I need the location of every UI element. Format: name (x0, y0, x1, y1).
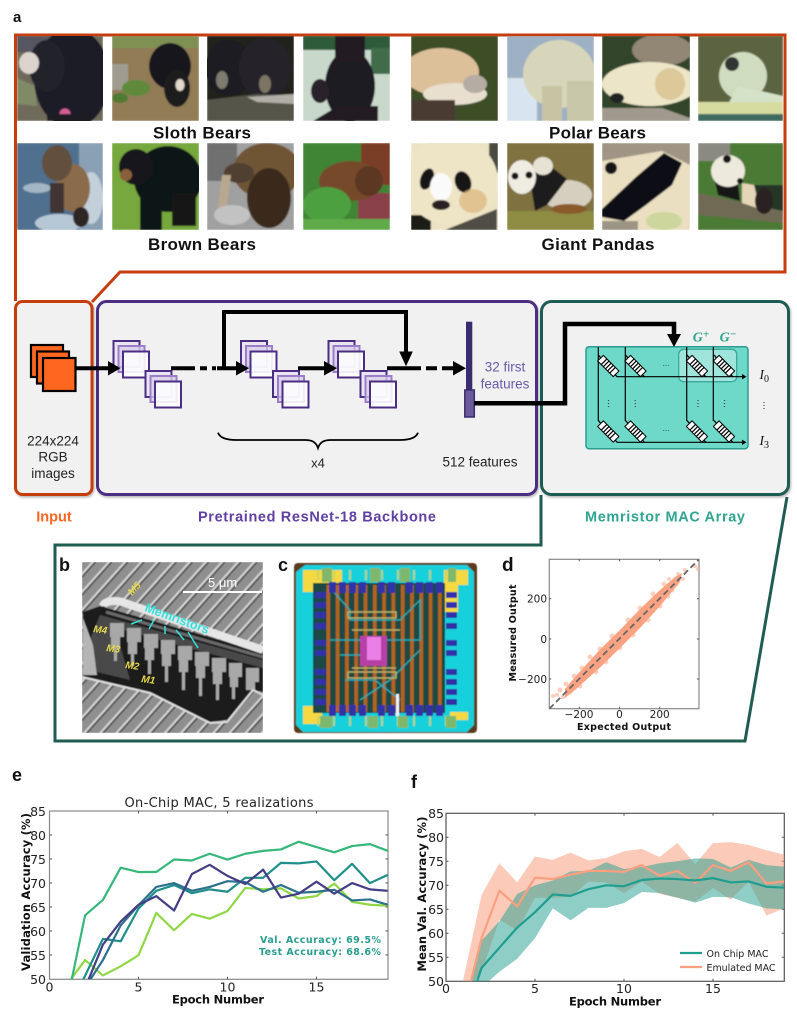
label: Sloth Bears: Sloth Bears (153, 124, 251, 142)
callout: accuracy values (259, 935, 381, 958)
legend: On Chip MAC (706, 949, 769, 960)
chart f: mean validation accuracy: 15 (705, 981, 721, 996)
chart e: validation accuracy: 50 (30, 972, 46, 987)
chart e: validation accuracy: 15 (309, 980, 324, 994)
chart e: validation accuracy: 60 (30, 924, 46, 939)
arrows: main data flow (76, 361, 466, 376)
conv block group 3 (328, 341, 396, 408)
panel: input box (16, 302, 92, 494)
label: Brown Bears: Brown Bears (148, 235, 256, 254)
chart f: mean validation accuracy: 80 (428, 830, 444, 845)
panel label c: c (278, 555, 288, 575)
chart f: mean validation accuracy: 10 (616, 981, 632, 996)
image: SEM of chip: Memristors (143, 601, 211, 637)
photo: sloth bear 1 (17, 36, 103, 121)
image: SEM of chip: M5 (126, 580, 144, 598)
photo: polar bear 2 (507, 36, 594, 121)
feature vector bar (465, 322, 474, 417)
brace x4 (218, 433, 418, 471)
heading: Input: Input (36, 510, 72, 526)
memristor crossbar array (586, 347, 764, 449)
chart e: validation accuracy: Epoch Number (172, 993, 264, 1007)
chart f: mean validation accuracy: 85 (428, 806, 444, 821)
photo: giant pandas 2 (507, 143, 594, 230)
panel label d: d (502, 555, 514, 576)
chart f: mean validation accuracy: 0 (442, 981, 450, 996)
legend (680, 949, 776, 974)
chart d: measured vs expected scatter: 200 (650, 709, 670, 721)
photo: brown bear 1 (17, 143, 103, 230)
memristor crossbar array: ... (663, 424, 669, 433)
photo: polar bear 4 (698, 36, 783, 121)
chart f: mean validation accuracy: 75 (428, 854, 444, 869)
panel label a: a (13, 9, 22, 26)
chart d: measured vs expected scatter: −200 (518, 674, 547, 686)
chart d: measured vs expected scatter: 0 (540, 634, 547, 646)
panel: resnet backbone box (98, 302, 536, 494)
panel label b: b (59, 555, 70, 575)
photo: giant panda 1 (411, 143, 498, 230)
chart f: mean validation accuracy: Epoch Number (569, 995, 661, 1009)
chart e title: On-Chip MAC, 5 realizations (124, 796, 314, 811)
chart f: mean validation accuracy: 65 (428, 902, 444, 917)
arrow: features to array (474, 324, 681, 403)
photo: sloth bear 2 (112, 36, 199, 121)
panel label e: e (12, 765, 22, 785)
chart e: validation accuracy: 0 (46, 980, 54, 994)
photo: sloth bear 4 (303, 36, 390, 121)
photo: giant panda 3 (602, 143, 690, 230)
heading: ResNet backbone: Pretrained ResNet-18 Backbone (198, 510, 436, 526)
photo: brown bear 4 (303, 143, 390, 230)
image: SEM of chip: M1 (141, 674, 156, 687)
chart d: measured vs expected scatter: Measured Output (508, 584, 519, 682)
chart f: mean validation accuracy: 5 (531, 981, 539, 996)
chart d: measured vs expected scatter: 0 (616, 709, 623, 721)
text: 32 first features: 32 first (485, 360, 525, 375)
panel: memristor array box (542, 302, 788, 494)
text: input description: images (31, 466, 75, 481)
image: SEM of chip: M2 (125, 660, 140, 673)
panel: bear dataset frame (16, 28, 785, 302)
chart e: validation accuracy: 55 (30, 948, 46, 963)
arrow: residual skip connection (224, 312, 412, 368)
heading: Memristor MAC Array: Memristor MAC Array (585, 510, 745, 526)
chart d: measured vs expected scatter (508, 559, 700, 733)
callout: accuracy values: Val. Accuracy: 69.5% (260, 935, 381, 946)
text: input description: RGB (38, 450, 68, 465)
chart f: mean validation accuracy: Mean Val. Accuracy (%) (415, 816, 429, 972)
icon: input image stack (31, 345, 76, 391)
legend: Emulated MAC (706, 963, 776, 974)
photo: brown bear 2 (112, 143, 199, 230)
chart d: measured vs expected scatter: Expected Output (577, 722, 671, 733)
chart e: validation accuracy: 80 (30, 828, 46, 843)
label: I3: I (760, 433, 764, 448)
text: 512 features: 512 features (442, 455, 518, 470)
image: SEM of chip: M3 (106, 643, 121, 656)
label: Giant Pandas: Giant Pandas (542, 235, 654, 254)
chart f: mean validation accuracy: 60 (428, 926, 444, 941)
label: G minus: G (720, 330, 730, 346)
photo: polar bear 1 (411, 36, 498, 121)
label: G plus: G (693, 330, 703, 346)
text: 32 first features: features (481, 377, 530, 392)
conv block group 1 (114, 341, 181, 408)
image: SEM of chip: M4 (93, 624, 108, 637)
photo: giant panda 4 (698, 143, 783, 230)
panel label f: f (411, 772, 418, 792)
label: I0: 0 (764, 374, 769, 385)
image: SEM of chip: 5 μm (208, 575, 237, 590)
chart f: mean validation accuracy (415, 806, 784, 1009)
chart f: mean validation accuracy: 70 (428, 878, 444, 893)
chart e: validation accuracy: 65 (30, 900, 46, 915)
photo: polar bear 3 (602, 36, 690, 121)
brace x4: x4 (311, 456, 325, 471)
chart f: mean validation accuracy: 55 (428, 950, 444, 965)
chart e: validation accuracy: 85 (30, 804, 46, 819)
label: G minus: − (730, 328, 736, 340)
label: I0: I (760, 367, 764, 382)
chart e: validation accuracy: 10 (220, 980, 235, 994)
callout: accuracy values: Test Accuracy: 68.6% (259, 947, 381, 958)
label: Polar Bears: Polar Bears (549, 124, 646, 142)
chart e: validation accuracy: 75 (30, 852, 46, 867)
chart d: measured vs expected scatter: 200 (527, 594, 547, 606)
photo: sloth bears 3 (207, 36, 294, 121)
text: input description: 224x224 (27, 434, 79, 449)
chart e: validation accuracy: 70 (30, 876, 46, 891)
chart e: validation accuracy: 5 (135, 980, 142, 994)
conv block group 2 (241, 341, 308, 408)
chart d: measured vs expected scatter: −200 (565, 709, 593, 721)
chart f: mean validation accuracy: 50 (428, 974, 444, 989)
label: G plus: + (703, 328, 709, 340)
image: chip micrograph (294, 563, 477, 733)
chart e: validation accuracy: Validation Accuracy (%) (19, 813, 33, 971)
connector frame to lower panels (55, 495, 787, 741)
chart e: validation accuracy (19, 796, 388, 1007)
image: SEM of chip (82, 562, 263, 733)
label: I3: 3 (764, 440, 769, 451)
memristor crossbar array: ... (663, 359, 669, 368)
photo: brown bear 3 (207, 143, 294, 230)
